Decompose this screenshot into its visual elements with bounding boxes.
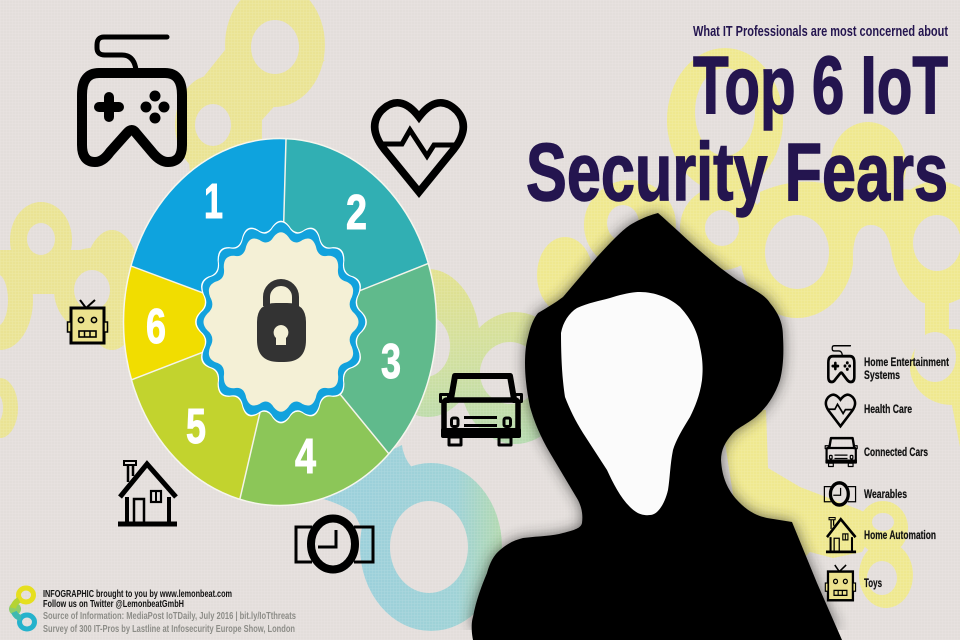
figure shadow <box>472 213 838 630</box>
number 6: 6 <box>146 300 166 354</box>
segment 2 <box>284 140 428 290</box>
number 5: 5 <box>186 400 206 454</box>
legend icon: house <box>826 518 856 552</box>
number 3: 3 <box>381 335 401 389</box>
figure silhouette <box>472 213 842 640</box>
segment 3 <box>341 264 436 452</box>
credit line 1: INFOGRAPHIC brought to you by www.lemonbeat.com <box>43 588 232 600</box>
icon: heart with pulse <box>375 103 463 192</box>
title block <box>526 23 948 218</box>
number 4: 4 <box>295 430 316 484</box>
icon: padlock <box>257 282 306 362</box>
legend icon: controller <box>828 346 854 382</box>
legend icon: watch <box>824 483 856 505</box>
wavy centre badge <box>195 221 367 423</box>
segment 4 <box>240 395 388 505</box>
icon: game controller <box>82 37 182 162</box>
legend label: home entertainment: Systems <box>864 368 900 382</box>
segment 5 <box>132 354 259 498</box>
legend label: health care: Health Care <box>864 402 912 416</box>
segment 1 <box>132 139 286 292</box>
credit line 2: Follow us on Twitter @LemonbeatGmbH <box>43 598 184 610</box>
icon: wristwatch <box>296 518 373 570</box>
legend icon: car <box>825 438 857 466</box>
segment 6 <box>124 267 205 379</box>
survey line: Survey of 300 IT-Pros by Lastline at Infosecurity Europe Show, London <box>43 623 295 635</box>
legend icon: robot <box>825 565 856 600</box>
number 1: 1 <box>204 175 223 229</box>
legend label: toys: Toys <box>864 576 882 590</box>
icon: house <box>118 461 177 524</box>
legend label: wearables: Wearables <box>864 487 907 501</box>
legend <box>824 346 949 600</box>
legend label: connected cars: Connected Cars <box>864 445 928 459</box>
legend icon: heart <box>826 395 855 426</box>
logo <box>9 588 34 629</box>
hooded figure <box>472 213 842 640</box>
source line: Source of Information: MediaPost IoTDaily, July 2016 | bit.ly/IoTthreats <box>43 610 296 622</box>
footer credits <box>9 588 296 635</box>
icon: robot toy <box>68 300 108 343</box>
number 2: 2 <box>346 186 367 240</box>
icon: car <box>440 376 522 445</box>
blank white face <box>561 292 703 515</box>
panel: six segment wheel <box>122 138 438 506</box>
green and yellow rings beside the wheel <box>376 269 570 444</box>
